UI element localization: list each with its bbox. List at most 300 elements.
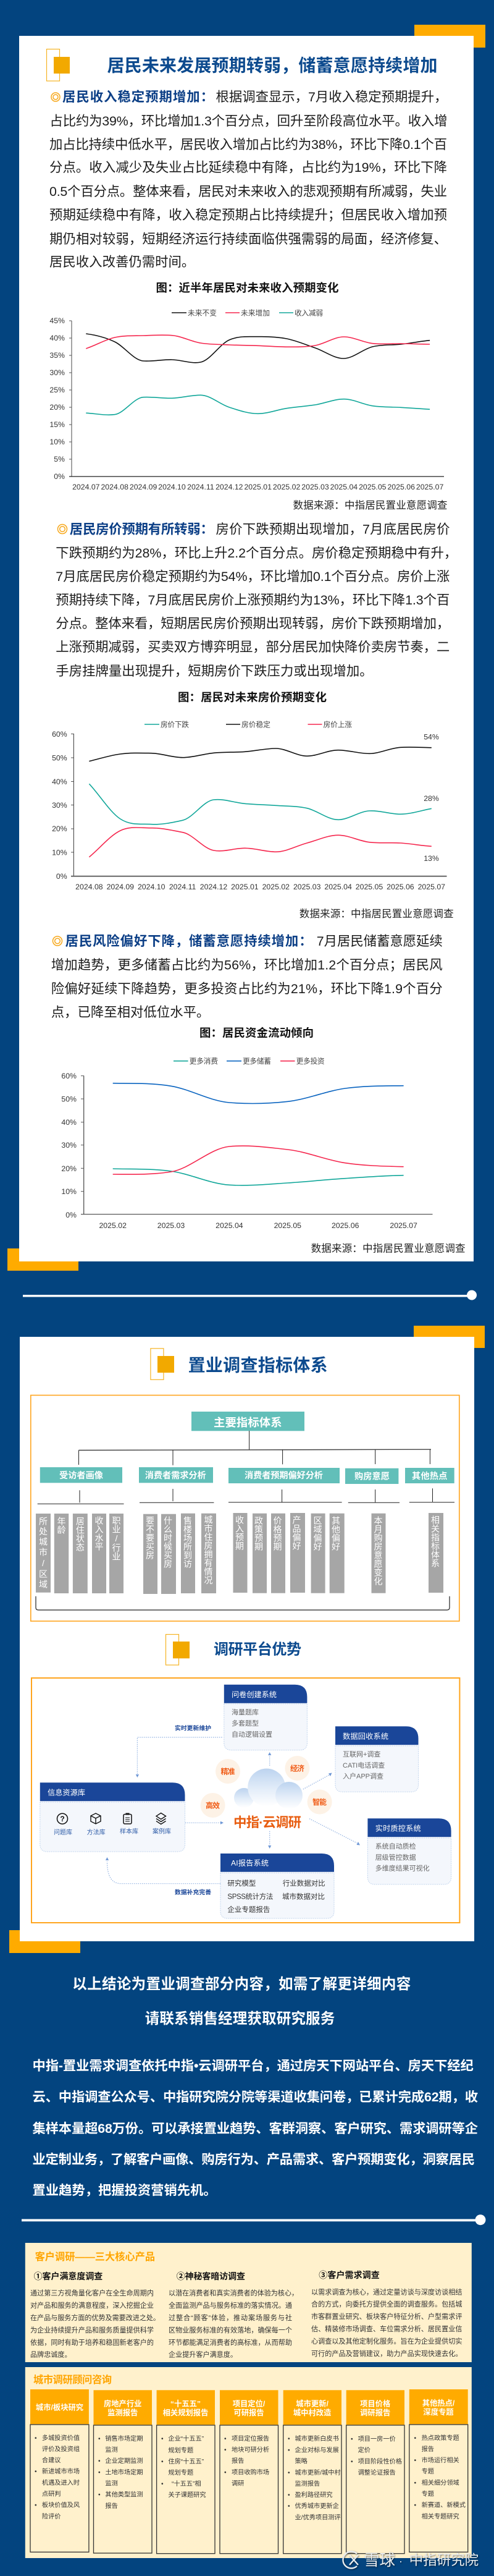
x axis: 2025.03 bbox=[157, 1221, 185, 1230]
card: AI report system: 研究模型 bbox=[227, 1879, 256, 1888]
column: 15th five-year plan: 企业“十五五” bbox=[168, 2434, 204, 2443]
product: satisfaction survey bbox=[30, 2271, 160, 2358]
watermark: 雪球 bbox=[364, 2552, 395, 2569]
legend: 房价上涨 bbox=[324, 720, 352, 729]
product: mystery shopping: ②神秘客暗访调查 bbox=[177, 2271, 245, 2281]
category: purchase intention bbox=[345, 1468, 398, 1593]
y axis: 40% bbox=[52, 777, 67, 786]
column: real estate monitoring: 房地产行业 bbox=[104, 2399, 141, 2409]
column: other hot topics: 专题 bbox=[422, 2467, 434, 2475]
card: resource library bbox=[40, 1782, 185, 1852]
text block: risk appetite and savings: 居民风险偏好下降，储蓄意愿持续增加： bbox=[65, 933, 312, 949]
column: city and district research: 点研判 bbox=[42, 2491, 61, 2498]
card: AI report system: AI报告系统 bbox=[231, 1858, 269, 1868]
column: other hot topics: 报告 bbox=[422, 2445, 434, 2453]
icon: method bank bbox=[87, 1813, 106, 1836]
icon: question bank: 问题库 bbox=[54, 1828, 72, 1836]
x axis: 2024.11 bbox=[187, 483, 214, 491]
text block: house price expectations: 房价下跌预期出现增加，7月底居民房价 bbox=[216, 522, 450, 537]
bars: 政策预期 bbox=[254, 1516, 264, 1551]
column: project pricing: • bbox=[351, 2436, 353, 2443]
x axis: 2025.06 bbox=[387, 883, 414, 891]
panel heading: 城市调研顾问咨询 bbox=[33, 2374, 112, 2386]
panel: three core products bbox=[25, 2243, 472, 2362]
bars bbox=[143, 1514, 216, 1594]
y axis: 60% bbox=[61, 1072, 77, 1080]
column: real estate monitoring: 监测 bbox=[105, 2480, 118, 2487]
x axis: 2025.07 bbox=[390, 1221, 417, 1230]
end value labels: 54% bbox=[424, 733, 439, 742]
column: urban renewal: 城中村改造 bbox=[293, 2408, 332, 2417]
column: urban renewal: 优秀城市更新企 bbox=[295, 2502, 339, 2510]
column: other hot topics: • bbox=[414, 2435, 416, 2442]
x axis: 2025.07 bbox=[416, 483, 443, 491]
icon: question bank bbox=[54, 1813, 72, 1836]
y axis: 30% bbox=[52, 801, 67, 810]
column: project positioning: 项目定位报告 bbox=[232, 2434, 269, 2443]
text block: house price expectations: 下跌预期约为28%，环比上升2.2个百分点。房价稳定预期稳中有升， bbox=[56, 546, 457, 561]
y axis bbox=[52, 730, 73, 881]
column: urban renewal: • bbox=[288, 2492, 290, 2499]
product: mystery shopping: 区物业服务标准的有效落地，确保每一个 bbox=[169, 2326, 292, 2334]
badge: economical bbox=[285, 1756, 309, 1781]
heading: indicator system: 置业调查指标体系 bbox=[188, 1355, 328, 1375]
service description: 集样本量超68万份。可以承接置业趋势、客群洞察、客户研究、需求调研等企 bbox=[32, 2121, 478, 2136]
line: more consumption bbox=[113, 1169, 404, 1185]
text block: income expectations: 居民收入稳定预期增加： bbox=[62, 89, 214, 104]
y axis: 45% bbox=[49, 316, 65, 325]
text block: income expectations: 分点。收入减少及失业占比延续稳中有降，占比约为19%，环比下降 bbox=[49, 160, 447, 175]
bars bbox=[429, 1513, 443, 1593]
column: project pricing bbox=[346, 2390, 404, 2554]
heading: platform advantages bbox=[165, 1634, 301, 1665]
legend bbox=[144, 720, 352, 729]
column: other hot topics: 热点政策专题 bbox=[422, 2434, 459, 2442]
chart title: house price expectations: 图：居民对未来房价预期变化 bbox=[178, 691, 327, 703]
x axis: 2024.10 bbox=[158, 483, 186, 491]
service description: 置业趋势，把握投资营销先机。 bbox=[32, 2183, 217, 2198]
panel: resident expectations bbox=[7, 25, 485, 1271]
line: income decrease bbox=[86, 395, 430, 415]
column: real estate monitoring: 监测 bbox=[105, 2446, 118, 2454]
x axis bbox=[69, 477, 444, 491]
card: questionnaire system: 多套题型 bbox=[232, 1719, 259, 1727]
flow arrow: data supplement: 数据补充完善 bbox=[175, 1888, 211, 1896]
product: satisfaction survey: 为企业持续提升产品和服务质量提供科学 bbox=[30, 2326, 154, 2334]
column: urban renewal bbox=[283, 2390, 341, 2554]
legend: 更多投资 bbox=[296, 1057, 325, 1066]
y axis: 25% bbox=[49, 386, 65, 394]
column: urban renewal: • bbox=[288, 2470, 290, 2476]
column: other hot topics: 相关细分领域 bbox=[422, 2478, 459, 2487]
column: 15th five-year plan: • bbox=[161, 2481, 164, 2488]
text block: house price expectations: 预期持续下降，7月底居民房价上涨预期约为13%，环比下降1.3个百 bbox=[56, 593, 450, 608]
x axis: 2024.09 bbox=[130, 483, 157, 491]
column: project positioning: 调研 bbox=[232, 2480, 244, 2487]
product: mystery shopping: 以潜在消费者和真实消费者的体验为核心， bbox=[169, 2289, 298, 2297]
badge: precise bbox=[216, 1759, 240, 1784]
product: demand survey: 估、精装修市场调查、车位需求分析、居民置业信 bbox=[311, 2324, 462, 2333]
y axis: 35% bbox=[49, 351, 65, 360]
x axis: 2025.01 bbox=[231, 883, 259, 891]
product: satisfaction survey: 品牌忠诚度。 bbox=[30, 2350, 72, 2358]
flow arrow: data supplement bbox=[106, 1857, 220, 1896]
text block: income expectations: 期仍相对较弱，短期经济运行持续面临供强需弱的局面，经济修复、 bbox=[49, 232, 447, 247]
x axis bbox=[71, 876, 447, 891]
x axis: 2024.12 bbox=[216, 483, 243, 491]
card: quality control system bbox=[367, 1818, 451, 1884]
column: city and district research: • bbox=[35, 2502, 37, 2509]
column: urban renewal: 城市更新/城中村 bbox=[295, 2468, 341, 2476]
category: preference analysis: 消费者预期偏好分析 bbox=[245, 1470, 323, 1481]
card: AI report system: 企业专题报告 bbox=[227, 1905, 270, 1913]
panel: indicator tree bbox=[31, 1396, 459, 1621]
column: 15th five-year plan: 规划专题 bbox=[168, 2468, 193, 2476]
bars: 价格预期 bbox=[273, 1516, 283, 1551]
card: questionnaire system: 自动逻辑设置 bbox=[232, 1730, 272, 1739]
source note: 数据来源：中指居民置业意愿调查 bbox=[311, 1242, 466, 1254]
line: more investment bbox=[113, 1146, 404, 1174]
text block: house price expectations: 7月底居民房价稳定预期约为54%，环比增加0.1个百分点。房价上涨 bbox=[56, 569, 450, 584]
panel: platform diagram bbox=[31, 1678, 459, 1923]
divider bbox=[22, 2214, 485, 2225]
legend: 更多消费 bbox=[190, 1057, 218, 1066]
product: demand survey: 以需求调查为核心，通过定量访谈与深度访谈相结 bbox=[311, 2287, 462, 2296]
column: city and district research: 板块价值及风 bbox=[42, 2501, 80, 2509]
y axis: 40% bbox=[49, 334, 65, 342]
x axis: 2025.04 bbox=[216, 1221, 243, 1230]
bars: 居住状态 bbox=[75, 1517, 85, 1551]
panel: city research consulting bbox=[25, 2367, 472, 2558]
column: project pricing: 项目价格 bbox=[360, 2399, 391, 2409]
heading: resident expectations bbox=[47, 49, 437, 81]
product: demand survey: 市客群置业研究、板块客户特征分析、户型需求评 bbox=[311, 2312, 462, 2321]
card: data collection system: 入户APP调查 bbox=[343, 1772, 383, 1781]
card: AI report system: SPSS统计方法 bbox=[227, 1892, 273, 1900]
bars: 相关指标体系 bbox=[430, 1515, 440, 1567]
column: project pricing: • bbox=[351, 2459, 353, 2465]
source note: 数据来源：中指居民置业意愿调查 bbox=[293, 499, 447, 511]
bars: 所处城市/区域 bbox=[38, 1517, 48, 1590]
category: preference analysis bbox=[228, 1468, 345, 1593]
product: satisfaction survey: 通过第三方视角量化客户在全生命周期内 bbox=[30, 2289, 154, 2297]
column: project pricing: 项目一房一价 bbox=[358, 2435, 396, 2443]
badge: precise: 精准 bbox=[221, 1766, 235, 1776]
card: quality control system: 实时质控系统 bbox=[375, 1823, 421, 1833]
bars: 售楼场所到访 bbox=[183, 1516, 193, 1569]
column: 15th five-year plan: • bbox=[161, 2459, 164, 2465]
column: city and district research: 险评价 bbox=[42, 2512, 61, 2520]
end value labels: 13% bbox=[424, 854, 439, 863]
card: questionnaire system: 问卷创建系统 bbox=[232, 1690, 277, 1699]
x axis: 2024.08 bbox=[75, 883, 103, 891]
line: price rising bbox=[89, 828, 432, 857]
column: project positioning bbox=[220, 2390, 278, 2554]
x axis: 2024.09 bbox=[107, 883, 134, 891]
text block: house price expectations: 上涨预期减弱，买卖双方博弈明显，部分居民加快降价卖房节奏，二 bbox=[56, 640, 450, 655]
column: project positioning: 报告 bbox=[232, 2457, 244, 2465]
service description: 云、中指调查公众号、中指研究院分院等渠道收集问卷，已累计完成62期，收 bbox=[32, 2089, 478, 2104]
end value labels: 28% bbox=[424, 794, 439, 803]
category: other hot topics bbox=[405, 1468, 454, 1593]
x axis: 2025.07 bbox=[418, 883, 445, 891]
bars: 本月购房意愿变化 bbox=[373, 1516, 383, 1586]
column: city and district research: • bbox=[35, 2468, 37, 2475]
y axis: 10% bbox=[61, 1187, 77, 1196]
y axis bbox=[61, 1072, 84, 1219]
y axis: 50% bbox=[61, 1095, 77, 1104]
product: mystery shopping: 企业提升客户满意度。 bbox=[169, 2350, 237, 2358]
card: questionnaire system: 海量题库 bbox=[232, 1708, 259, 1716]
column: other hot topics: • bbox=[414, 2457, 416, 2464]
closing statement: 请联系销售经理获取研究服务 bbox=[145, 2010, 335, 2027]
category: other hot topics: 其他热点 bbox=[412, 1471, 447, 1481]
x axis: 2025.04 bbox=[330, 483, 358, 491]
y axis: 20% bbox=[61, 1164, 77, 1173]
bars: 收入预期 bbox=[235, 1515, 245, 1551]
text block: income expectations: 占比约为39%，环比增加1.3个百分点，回升至阶段高位水平。收入增 bbox=[49, 114, 447, 129]
line: price falling bbox=[89, 784, 432, 824]
product: mystery shopping bbox=[169, 2271, 298, 2358]
divider bbox=[23, 1290, 477, 1300]
column: project pricing: 调整论证报告 bbox=[358, 2468, 396, 2476]
legend: 未来不变 bbox=[188, 308, 217, 317]
line: income unchanged bbox=[86, 334, 430, 363]
bars: 年龄 bbox=[57, 1517, 67, 1534]
card: AI report system: 行业数据对比 bbox=[283, 1879, 325, 1888]
bars bbox=[36, 1514, 124, 1593]
text block: risk appetite and savings bbox=[51, 933, 443, 1020]
y axis: 0% bbox=[65, 1211, 77, 1219]
x axis: 2025.05 bbox=[359, 483, 387, 491]
column: city and district research: 评价及投资组 bbox=[42, 2445, 80, 2453]
text block: house price expectations: 居民房价预期有所转弱： bbox=[70, 522, 214, 537]
column: other hot topics: • bbox=[414, 2480, 416, 2487]
text block: house price expectations: 手房挂牌量出现提升，短期房价下跌压力或出现增加。 bbox=[56, 664, 373, 679]
x axis: 2025.01 bbox=[244, 483, 272, 491]
flow arrow: realtime update bbox=[136, 1724, 222, 1777]
x axis: 2024.10 bbox=[138, 883, 165, 891]
product: satisfaction survey: 对产品和服务的满意程度，深入挖掘企业 bbox=[30, 2301, 154, 2310]
y axis: 10% bbox=[52, 848, 67, 857]
column: project pricing: 调研报告 bbox=[360, 2408, 390, 2417]
badge: efficient bbox=[201, 1793, 225, 1818]
heading: indicator system bbox=[151, 1349, 328, 1379]
service description: 业定制业务，了解客户画像、购房行为、产品需求、客户预期变化，洞察居民 bbox=[32, 2151, 475, 2167]
card: questionnaire system bbox=[224, 1685, 307, 1750]
bars: 什么时候买房 bbox=[163, 1516, 173, 1568]
x axis: 2024.08 bbox=[101, 483, 128, 491]
column: 15th five-year plan: 关子课题研究 bbox=[168, 2491, 206, 2499]
y axis: 30% bbox=[49, 368, 65, 377]
column: city and district research: 合建议 bbox=[42, 2456, 61, 2464]
text block: risk appetite and savings: 增加趋势，更多储蓄占比约为56%，环比增加1.2个百分点；居民风 bbox=[51, 958, 443, 973]
legend: 收入减弱 bbox=[295, 308, 323, 317]
card: quality control system: 多维度结果可视化 bbox=[375, 1864, 430, 1873]
column: city and district research: 机遇及进入时 bbox=[42, 2478, 80, 2487]
text block: income expectations: 0.5个百分点。整体来看，居民对未来收入的悲观预期有所减弱，失业 bbox=[49, 184, 447, 199]
badge: intelligent bbox=[308, 1790, 332, 1815]
x axis: 2025.02 bbox=[262, 883, 290, 891]
card: quality control system: 层级管控数据 bbox=[375, 1853, 416, 1862]
line: income increase bbox=[86, 335, 430, 349]
panel: survey system bbox=[9, 1326, 485, 1953]
end value labels bbox=[424, 733, 439, 863]
column: urban renewal: 业/优秀项目测评 bbox=[295, 2513, 341, 2522]
column: other hot topics: 专题 bbox=[422, 2489, 434, 2498]
product: demand survey bbox=[311, 2270, 462, 2358]
legend: 更多储蓄 bbox=[243, 1057, 271, 1066]
y axis bbox=[49, 316, 72, 481]
x axis: 2025.04 bbox=[324, 883, 352, 891]
heading: resident expectations: 居民未来发展预期转弱，储蓄意愿持续增加 bbox=[107, 56, 437, 75]
column: project positioning: 地块可研分析 bbox=[232, 2446, 269, 2454]
text block: risk appetite and savings: 7月居民储蓄意愿延续 bbox=[317, 934, 443, 949]
chart title: capital flow: 图：居民资金流动倾向 bbox=[199, 1026, 314, 1040]
card: data collection system bbox=[335, 1726, 419, 1792]
icon: case bank: 案例库 bbox=[153, 1827, 171, 1836]
x axis: 2025.05 bbox=[274, 1221, 301, 1230]
x axis: 2024.11 bbox=[169, 883, 196, 891]
card: data collection system: 数据回收系统 bbox=[343, 1732, 388, 1740]
text block: house price expectations bbox=[56, 522, 457, 679]
text block: income expectations bbox=[49, 89, 447, 269]
y axis: 30% bbox=[61, 1141, 77, 1150]
closing statement: 以上结论为置业调查部分内容，如需了解更详细内容 bbox=[72, 1976, 411, 1993]
panel heading: 客户调研——三大核心产品 bbox=[35, 2251, 155, 2263]
column: 15th five-year plan: 相关规划报告 bbox=[163, 2408, 208, 2417]
line chart: house price expectations bbox=[52, 720, 446, 891]
text block: income expectations: 加占比持续中低水平，居民收入增加占比约为38%，环比下降0.1个百 bbox=[49, 137, 447, 152]
column: other hot topics: 相关专题研究 bbox=[422, 2512, 459, 2520]
badge: efficient: 高效 bbox=[206, 1800, 220, 1810]
product: demand survey: 心调查以及其他定制化服务。旨在为企业提供切实 bbox=[311, 2337, 462, 2345]
y axis: 60% bbox=[52, 730, 67, 739]
column: real estate monitoring: 报告 bbox=[105, 2502, 118, 2510]
heading: platform advantages: 调研平台优势 bbox=[214, 1640, 301, 1658]
legend bbox=[174, 1057, 325, 1066]
text block: income expectations: 居民收入改善仍需时间。 bbox=[49, 255, 195, 269]
y axis: 5% bbox=[54, 455, 65, 464]
x axis: 2025.06 bbox=[332, 1221, 359, 1230]
y axis: 10% bbox=[49, 438, 65, 446]
column: real estate monitoring: 销售市场定期 bbox=[105, 2434, 143, 2443]
column: real estate monitoring: • bbox=[98, 2458, 101, 2465]
watermark: · bbox=[399, 2555, 403, 2567]
category: demand analysis: 消费者需求分析 bbox=[145, 1470, 206, 1481]
x axis: 2025.03 bbox=[301, 483, 329, 491]
bars bbox=[372, 1514, 385, 1593]
bars: 区域偏好 bbox=[312, 1516, 322, 1551]
icon: question bank: ? bbox=[60, 1815, 65, 1823]
text block: house price expectations: 分点。整体来看，短期居民房价预期出现转弱，房价下跌预期增加， bbox=[56, 616, 450, 631]
y axis: 20% bbox=[49, 403, 65, 412]
line chart: income expectations bbox=[49, 308, 444, 491]
column: city and district research: 新进城市市场 bbox=[42, 2467, 80, 2475]
column: real estate monitoring: 土地市场定期 bbox=[105, 2468, 143, 2476]
column: 15th five-year plan: 住房“十五五” bbox=[168, 2457, 204, 2465]
closing statement bbox=[72, 1976, 411, 2027]
column: urban renewal: 城市更新/ bbox=[296, 2399, 329, 2409]
card: AI report system bbox=[220, 1854, 334, 1918]
y axis: 50% bbox=[52, 754, 67, 763]
bars: 收入水平 bbox=[94, 1516, 104, 1551]
y axis: 0% bbox=[54, 472, 65, 481]
column: 15th five-year plan: “十五五” bbox=[170, 2399, 201, 2409]
x axis: 2024.07 bbox=[72, 483, 100, 491]
icon: cloud bbox=[234, 1769, 303, 1809]
card: resource library: 信息资源库 bbox=[48, 1787, 85, 1797]
x axis: 2025.02 bbox=[273, 483, 300, 491]
line chart: capital flow bbox=[61, 1057, 432, 1230]
x axis bbox=[81, 1214, 432, 1230]
column: 15th five-year plan: 规划专题 bbox=[168, 2446, 193, 2454]
x axis: 2025.03 bbox=[293, 883, 321, 891]
column: project positioning: 项目收购市场 bbox=[232, 2468, 269, 2476]
column: real estate monitoring: • bbox=[98, 2470, 101, 2476]
product: demand survey: 可行的产品及营销建议，助力产品实现快速去化。 bbox=[311, 2349, 462, 2358]
column: city and district research: 城市/板块研究 bbox=[36, 2403, 83, 2412]
product: mystery shopping: 全面监测产品与服务标准的落实情况。通 bbox=[169, 2301, 292, 2310]
category: respondent profile bbox=[36, 1467, 124, 1593]
column: project positioning: • bbox=[224, 2470, 227, 2476]
y axis: 20% bbox=[52, 824, 67, 833]
card: data collection system: 互联网+调查 bbox=[343, 1750, 380, 1758]
text block: income expectations: 根据调查显示，7月收入稳定预期提升， bbox=[216, 90, 447, 104]
bars: 要不要买房 bbox=[145, 1516, 155, 1559]
y axis: 15% bbox=[49, 420, 65, 429]
x axis: 2024.12 bbox=[200, 883, 227, 891]
column: real estate monitoring: 其他类型监测 bbox=[105, 2491, 143, 2498]
bars: 城市住房拥有情况 bbox=[204, 1515, 214, 1585]
icon: sample bank bbox=[120, 1813, 138, 1836]
badge: intelligent: 智能 bbox=[312, 1797, 327, 1807]
tree connectors bbox=[36, 1431, 454, 1610]
column: 15th five-year plan: “十五五”相 bbox=[172, 2480, 201, 2488]
column: real estate monitoring bbox=[94, 2390, 152, 2553]
badge: economical: 经济 bbox=[290, 1763, 304, 1773]
icon: sample bank: 样本库 bbox=[120, 1827, 138, 1836]
column: city and district research: 多城投资价值 bbox=[42, 2434, 80, 2442]
column: other hot topics: 新赛道、新模式 bbox=[422, 2501, 466, 2509]
column: urban renewal: 盈利路径研究 bbox=[295, 2491, 333, 2499]
column: 15th five-year plan: • bbox=[161, 2436, 164, 2443]
column: city and district research: • bbox=[35, 2435, 37, 2442]
column: project pricing: 项目阶段性价格 bbox=[358, 2457, 402, 2465]
service description bbox=[32, 2058, 478, 2198]
flow arrows: center to systems bbox=[185, 1752, 360, 1849]
column: urban renewal: 监测报告 bbox=[295, 2480, 320, 2488]
x axis: 2025.05 bbox=[356, 883, 383, 891]
watermark: 中指研究院 bbox=[409, 2553, 479, 2568]
root node: 主要指标体系 bbox=[214, 1416, 282, 1429]
x axis: 2025.02 bbox=[99, 1221, 127, 1230]
legend: 房价下跌 bbox=[161, 720, 189, 729]
column: urban renewal: • bbox=[288, 2436, 290, 2443]
text block: risk appetite and savings: 险偏好延续下降趋势，更多投资占比约为21%，环比下降1.9个百分 bbox=[51, 981, 443, 996]
bars: 其他偏好 bbox=[331, 1516, 341, 1551]
category: demand analysis bbox=[139, 1467, 216, 1594]
line: price stable bbox=[89, 747, 432, 761]
legend bbox=[172, 308, 323, 317]
column: urban renewal: • bbox=[288, 2503, 290, 2510]
line: more savings bbox=[113, 1083, 404, 1103]
card: AI report system: 城市数据对比 bbox=[282, 1892, 325, 1900]
column: other hot topics: • bbox=[414, 2502, 416, 2509]
column: 15th five-year plan bbox=[157, 2390, 215, 2554]
column: urban renewal: 策略 bbox=[295, 2457, 308, 2465]
column: urban renewal: • bbox=[288, 2447, 290, 2454]
